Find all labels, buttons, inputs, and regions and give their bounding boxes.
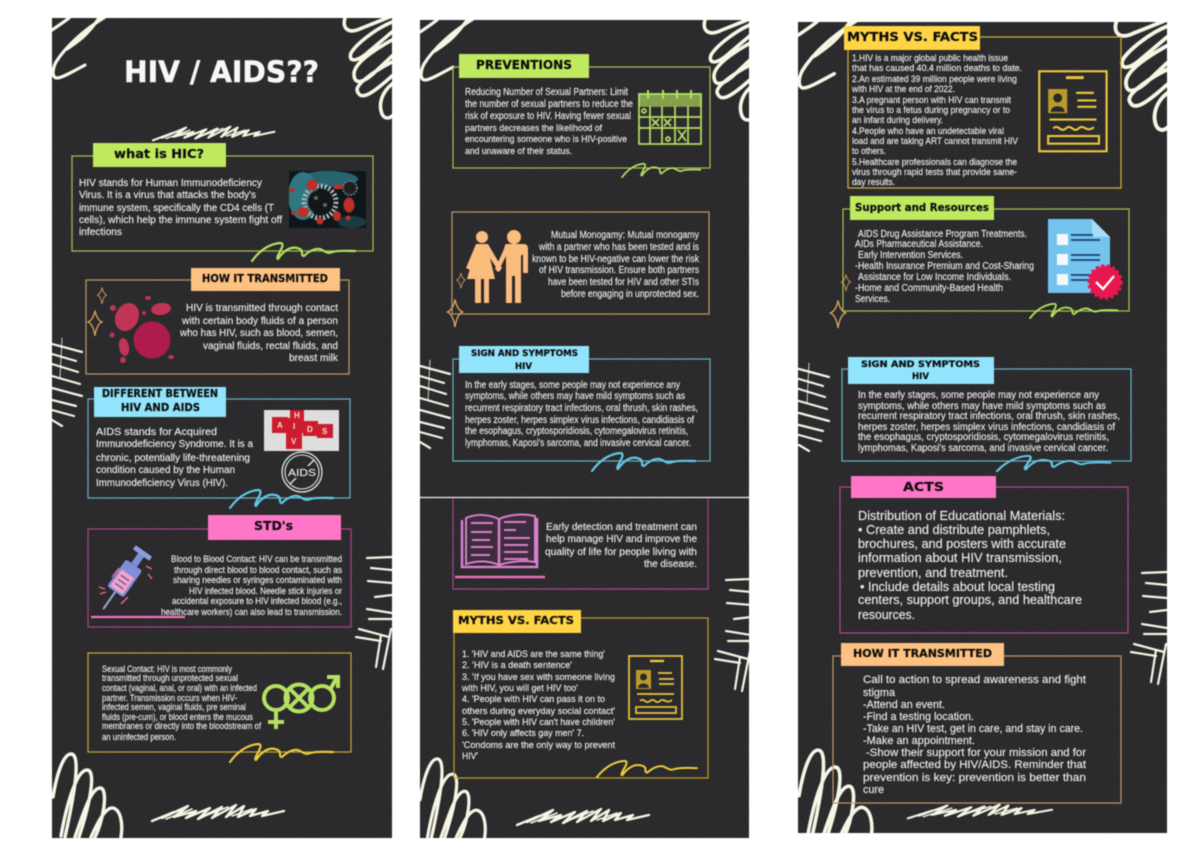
chalk scribble: [152, 805, 284, 821]
section: sign and symptoms: [453, 346, 710, 471]
section: sexual contact: partner. Transmission occurs when HIV-: [102, 693, 237, 703]
section: STD's: [88, 515, 351, 627]
image: red AIDS HIV cubes: A: [277, 421, 283, 430]
section: myths vs facts: with HIV at the end of 2022.: [851, 84, 955, 94]
section: sexual contact: membranes or directly into the bloodstream of: [102, 721, 261, 731]
section: what is HIC: Virus. It is a virus that attacks the body's: [79, 190, 256, 201]
section: different between HIV and AIDS: HIV AND AIDS: [121, 401, 200, 414]
section: how it transmitted call to action: -Make an appointment.: [863, 735, 975, 747]
section: sign and symptoms: lymphomas, Kaposi's sarcoma, and invasive cervical cancer.: [858, 443, 1108, 454]
section: support and resources: Support and Resources: [855, 201, 989, 214]
section: myths vs facts: 'Condoms are the only way to prevent: [462, 740, 615, 750]
section: early detection: help manage HIV and improve the: [546, 534, 697, 545]
section: acts: Distribution of Educational Materials:: [858, 508, 1065, 523]
section: how it transmitted: HOW IT TRANSMITTED: [202, 272, 328, 285]
image: red AIDS HIV cubes: H: [294, 411, 300, 420]
panel: preventions column: [420, 18, 752, 838]
section: acts: ACTS: [903, 480, 944, 494]
image: red AIDS HIV cubes: V: [291, 437, 297, 446]
section: myths vs facts: MYTHS VS. FACTS: [847, 30, 978, 44]
section: different between HIV and AIDS: Immunodeficiency Syndrome. It is a: [96, 439, 253, 450]
section: mutual monogamy: known to be HIV-negative can lower the risk: [532, 254, 700, 265]
section: how it transmitted call to action: -Take an HIV test, get in care, and stay in care.: [863, 723, 1083, 735]
section: STD's: healthcare workers) can also lead to transmission.: [161, 607, 342, 617]
section: support and resources: Early Intervention Services.: [858, 250, 963, 261]
section: myths vs facts: 6. 'HIV only affects gay men' 7.: [462, 728, 584, 738]
section: sexual contact: contact (vaginal, anal, or oral) with an infected: [102, 683, 257, 693]
section: myths vs facts: virus through rapid tests that provide same-: [852, 167, 1017, 177]
section: early detection: [453, 499, 708, 589]
section: how it transmitted: with certain body fluids of a person: [181, 316, 338, 327]
section: myths vs facts: others during everyday social contact': [462, 706, 615, 716]
section: preventions: partners decreases the likelihood of: [465, 123, 602, 133]
section: different between HIV and AIDS: [88, 387, 350, 508]
icon: sparkles: [88, 288, 106, 336]
icon: calendar: [639, 90, 701, 144]
section: different between HIV and AIDS: chronic, potentially life-threatening: [96, 453, 250, 464]
section: myths vs facts: an infant during delivery.: [852, 115, 943, 125]
section: myths vs facts: 5.Healthcare professionals can diagnose the: [852, 157, 1017, 167]
section: support and resources: -Health Insurance Premium and Cost-Sharing: [855, 261, 1034, 272]
section: early detection: Early detection and treatment can: [546, 522, 697, 533]
icon: checklist document: [1048, 219, 1121, 298]
section: acts: information about HIV transmission,: [858, 550, 1062, 565]
section: sign and symptoms: the esophagus, cryptosporidiosis, cytomegalovirus retinitis,: [465, 426, 688, 437]
section: myths vs facts: 4.People who have an undetectable viral: [852, 126, 1004, 136]
section: sexual contact: infected semen, vaginal fluids, pre seminal: [102, 702, 246, 712]
section: acts: resources.: [858, 607, 915, 622]
image: virus and red blood cells: [288, 171, 366, 228]
image: red AIDS HIV cubes: [264, 410, 339, 451]
section: acts: [840, 476, 1128, 633]
section: STD's: Blood to Blood Contact: HIV can be transmitted: [171, 554, 342, 564]
section: STD's: through direct blood to blood contact, such as: [174, 565, 342, 575]
section: sign and symptoms: recurrent respiratory tract infections, oral thrush, skin rashes,: [858, 411, 1120, 422]
section: how it transmitted: vaginal fluids, rectal fluids, and: [203, 341, 338, 352]
icon: blood cells: [110, 296, 174, 363]
section: sign and symptoms: HIV: [515, 362, 532, 372]
section: sign and symptoms: [842, 357, 1131, 471]
section: preventions: and unaware of their status.: [465, 146, 572, 156]
section: sexual contact: [88, 653, 351, 762]
section: preventions: encountering someone who is HIV-positive: [465, 134, 627, 144]
section: myths vs facts: 2. 'HIV is a death sentence': [462, 660, 572, 670]
section: support and resources: Services.: [855, 294, 890, 305]
icon: ID document: [629, 656, 682, 719]
section: sign and symptoms: HIV: [912, 372, 929, 382]
section: myths vs facts: [453, 610, 708, 778]
section: sign and symptoms: recurrent respiratory tract infections, oral thrush, skin rashes,: [465, 403, 698, 414]
section: preventions: the number of sexual partners to reduce the: [465, 99, 633, 110]
section: how it transmitted: breast milk: [289, 353, 339, 364]
section: what is HIC: HIV stands for Human Immunodeficiency: [79, 178, 262, 189]
section: STD's: sharing needles or syringes contaminated with: [173, 575, 342, 585]
section: different between HIV and AIDS: condition caused by the Human: [96, 465, 235, 476]
section: myths vs facts: 4. 'People with HIV can pass it on to: [462, 694, 605, 704]
section: acts: centers, support groups, and healthcare: [858, 592, 1082, 607]
image: red AIDS HIV cubes: I: [293, 422, 295, 431]
icon: couple holding hands: [466, 230, 528, 303]
section: sign and symptoms: SIGN AND SYMPTOMS: [471, 349, 578, 359]
section: acts: • Create and distribute pamphlets,: [858, 522, 1050, 537]
section: mutual monogamy: have been tested for HIV and other STIs: [548, 277, 699, 288]
section: sign and symptoms: the esophagus, cryptosporidiosis, cytomegalovirus retinitis,: [858, 432, 1109, 443]
section: myths vs facts: to others.: [852, 146, 886, 156]
panel: myths and resources column: [798, 20, 1167, 838]
section: early detection: quality of life for people living with: [545, 547, 697, 558]
section: acts: brochures, and posters with accurate: [858, 536, 1066, 551]
icon: linked gender symbols: [264, 677, 338, 729]
panel: what is HIV column: [52, 16, 392, 838]
chalk scribble: [517, 809, 649, 825]
icon: open book: [462, 515, 537, 567]
section: myths vs facts: HIV': [462, 751, 478, 761]
section: myths vs facts: 1. 'HIV and AIDS are the same thing': [462, 649, 605, 659]
section: myths vs facts: the virus to a fetus during pregnancy or to: [852, 105, 1010, 115]
section: sexual contact: Sexual Contact: HIV is most commonly: [102, 664, 232, 674]
section: sign and symptoms: lymphomas, Kaposi's sarcoma, and invasive cervical cancer.: [465, 438, 691, 449]
section: support and resources: Assistance for Low Income Individuals.: [858, 272, 1011, 283]
section: how it transmitted call to action: stigma: [863, 687, 896, 699]
title: HIV / AIDS??: [124, 55, 319, 89]
section: sign and symptoms: In the early stages, some people may not experience any: [465, 380, 680, 391]
section: sign and symptoms: In the early stages, some people may not experience any: [858, 390, 1099, 401]
icon: sparkles: [830, 274, 850, 328]
section: mutual monogamy: before engaging in unprotected sex.: [561, 289, 699, 300]
section: how it transmitted call to action: Call to action to spread awareness and fight: [863, 674, 1086, 686]
section: support and resources: AIDs Pharmaceutical Assistance.: [855, 239, 983, 250]
section: how it transmitted call to action: -Show their support for your mission and for: [866, 747, 1086, 759]
image: red AIDS HIV cubes: D: [307, 425, 313, 434]
section: how it transmitted call to action: prevention is key: prevention is better than: [863, 772, 1086, 784]
section: sign and symptoms: herpes zoster, herpes simplex virus infections, candidiasis of: [858, 422, 1115, 433]
section: STD's: accidental exposure to HIV infected blood (e.g.,: [172, 596, 342, 606]
section: STD's: HIV infected blood. Needle stick injuries or: [189, 586, 342, 596]
chalk scribble: [153, 127, 274, 140]
section: different between HIV and AIDS: Immunodeficiency Virus (HIV).: [96, 478, 228, 489]
section: myths vs facts: 2.An estimated 39 million people were living: [852, 74, 1017, 84]
icon: ID document: [1039, 71, 1107, 151]
section: mutual monogamy: of HIV transmission. Ensure both partners: [539, 265, 699, 276]
section: early detection: the disease.: [644, 559, 697, 570]
section: myths vs facts: load and are taking ART cannot transmit HIV: [852, 136, 1018, 146]
section: STD's: STD's: [254, 519, 293, 533]
section: what is HIC: immune system, specifically the CD4 cells (T: [79, 203, 274, 214]
section: support and resources: [830, 196, 1129, 328]
image: red AIDS HIV cubes: S: [322, 427, 328, 436]
section: myths vs facts: 3.A pregnant person with HIV can transmit: [852, 95, 1011, 105]
section: sexual contact: fluids (pre-cum), or blood enters the mucous: [102, 712, 253, 722]
section: myths vs facts: 1.HIV is a major global public health issue: [852, 53, 1008, 63]
section: how it transmitted call to action: -Find a testing location.: [863, 711, 974, 723]
icon: no AIDS symbol: AIDS: [288, 467, 316, 479]
section: myths vs facts: that has caused 40.4 million deaths to date.: [852, 63, 1022, 73]
section: what is HIC: cells), which help the immune system fight off: [79, 215, 282, 226]
section: sign and symptoms: symptoms, while others may have mild symptoms such as: [465, 391, 685, 402]
section: acts: prevention, and treatment.: [858, 565, 1008, 580]
section: how it transmitted call to action: cure: [863, 784, 884, 796]
section: acts: • Include details about local testing: [860, 579, 1055, 594]
section: how it transmitted: who has HIV, such as blood, semen,: [179, 328, 338, 339]
chalk scribble: [908, 805, 1052, 818]
section: what is HIC: infections: [79, 227, 122, 238]
section: how it transmitted: HIV is transmitted through contact: [186, 303, 338, 314]
section: different between HIV and AIDS: DIFFERENT BETWEEN: [102, 387, 218, 400]
section: mutual monogamy: [448, 212, 709, 327]
section: different between HIV and AIDS: AIDS stands for Acquired: [96, 427, 217, 438]
section: myths vs facts: 3. 'If you have sex with someone living: [462, 672, 615, 682]
section: mutual monogamy: Mutual Monogamy: Mutual monogamy: [551, 230, 699, 241]
section: preventions: Reducing Number of Sexual Partners: Limit: [465, 87, 628, 98]
section: what is HIC: what is HIC?: [114, 147, 204, 161]
section: how it transmitted call to action: people affected by HIV/AIDS. Reminder that: [863, 759, 1086, 771]
section: how it transmitted call to action: -Attend an event.: [863, 699, 945, 711]
section: myths vs facts: 5. 'People with HIV can't have children': [462, 717, 615, 727]
section: how it transmitted: [86, 268, 349, 374]
section: myths vs facts: day results.: [852, 177, 895, 187]
section: sexual contact: an uninfected person.: [102, 732, 176, 742]
section: sign and symptoms: symptoms, while others may have mild symptoms such as: [858, 401, 1106, 412]
section: how it transmitted call to action: HOW IT TRANSMITTED: [853, 647, 992, 660]
section: sign and symptoms: SIGN AND SYMPTOMS: [861, 360, 980, 370]
section: preventions: risk of exposure to HIV. Having fewer sexual: [465, 111, 631, 122]
section: how it transmitted call to action: [833, 643, 1121, 803]
section: support and resources: -Home and Community-Based Health: [855, 283, 1003, 294]
section: preventions: PREVENTIONS: [476, 58, 572, 72]
section: what is HIC: [72, 143, 373, 261]
section: myths vs facts: MYTHS VS. FACTS: [458, 614, 574, 627]
section: support and resources: AIDS Drug Assistance Program Treatments.: [858, 229, 1027, 240]
icon: no AIDS symbol: [282, 452, 322, 492]
section: preventions: [453, 54, 710, 177]
section: sexual contact: transmitted through unprotected sexual: [102, 673, 238, 683]
section: mutual monogamy: with a partner who has been tested and is: [538, 242, 699, 253]
section: myths vs facts: [844, 26, 1121, 188]
section: myths vs facts: with HIV, you will get HIV too': [461, 683, 578, 693]
icon: syringe: [95, 545, 152, 615]
section: sign and symptoms: herpes zoster, herpes simplex virus infections, candidiasis of: [465, 415, 694, 426]
icon: sparkles: [448, 273, 465, 327]
